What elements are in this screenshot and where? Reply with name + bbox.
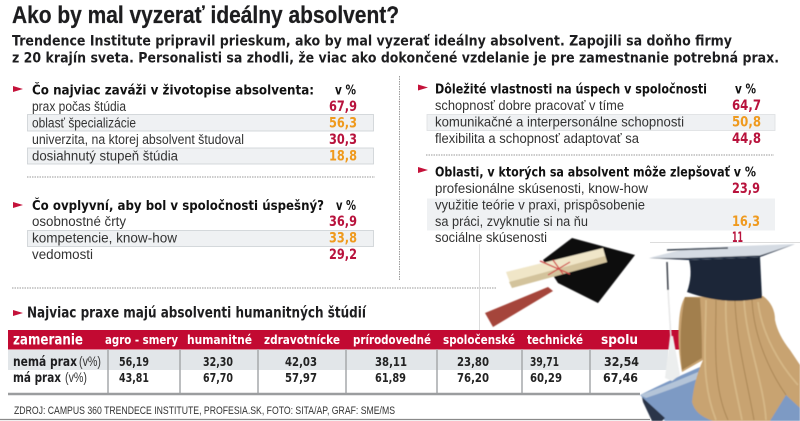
row labels <box>435 98 684 146</box>
row values: 11 <box>732 230 743 246</box>
marker arrow <box>13 202 23 208</box>
table header: technické <box>527 332 583 347</box>
row: ma prax: 60,29 <box>530 370 562 385</box>
panel: oblasti zlepsovania <box>418 164 775 246</box>
row: nema prax: 56,19 <box>119 354 149 369</box>
row labels <box>32 214 177 262</box>
table header: zdravotnícke <box>264 332 340 347</box>
icon: mortarboard with diploma scroll <box>485 238 635 327</box>
row: ma prax: 61,89 <box>375 370 406 385</box>
row labels: profesionálne skúsenosti, know-how <box>435 181 648 196</box>
gown <box>640 360 800 421</box>
row values <box>329 214 357 263</box>
row: ma prax: 76,20 <box>457 370 489 385</box>
row: nema prax <box>13 354 639 370</box>
unit label: v % <box>335 82 356 98</box>
row labels: kompetencie, know-how <box>32 230 177 246</box>
row: nema prax: 23,80 <box>457 354 489 369</box>
row band <box>427 114 775 130</box>
row labels: sociálne skúsenosti <box>435 230 547 245</box>
table header: prírodovedné <box>353 332 431 347</box>
row values: 50,8 <box>732 114 761 130</box>
row labels: dosiahnutý stupeň štúdia <box>32 148 178 164</box>
row: ma prax: má prax <box>13 371 61 386</box>
unit label: v % <box>336 198 356 214</box>
row labels: využitie teórie v praxi, prispôsobenie <box>435 198 645 212</box>
hair <box>678 296 800 421</box>
illustration: graduate seen from behind <box>640 244 800 421</box>
row: nema prax: 38,11 <box>375 354 407 369</box>
row values <box>732 98 761 147</box>
heading: Dôležité vlastnosti na úspech v spoločnosti <box>435 82 707 98</box>
table header: zameranie <box>13 330 83 348</box>
row labels: flexibilita a schopnosť adaptovať sa <box>435 131 639 146</box>
row values <box>329 99 357 164</box>
row values: 16,3 <box>732 214 760 230</box>
row: ma prax: 43,81 <box>119 370 149 385</box>
source line: ZDROJ: CAMPUS 360 TRENDECE INSTITUTE, PROFESIA.SK, FOTO: SITA/AP, GRAF: SME/MS <box>14 405 395 417</box>
row: ma prax <box>13 370 638 386</box>
row: nema prax: 32,30 <box>203 354 233 369</box>
marker arrow <box>418 84 428 90</box>
panel: co ovplyvni uspech <box>13 196 374 263</box>
row band <box>427 198 775 230</box>
row labels: schopnosť dobre pracovať v tíme <box>435 98 624 113</box>
table header: spoločenské <box>443 332 515 347</box>
row values: 36,9 <box>329 214 357 230</box>
intro text <box>12 34 779 66</box>
row: ma prax: 67,46 <box>603 370 638 385</box>
unit label: v % <box>735 82 756 98</box>
row: nema prax: nemá prax <box>13 355 78 370</box>
table header: humanitné <box>187 332 252 347</box>
row labels: osobnostné črty <box>32 214 126 229</box>
panel: dolezite vlastnosti <box>418 82 775 147</box>
row bands <box>28 114 374 164</box>
row labels: oblasť špecializácie <box>32 116 136 130</box>
marker arrow <box>418 167 428 173</box>
section heading: table: Najviac praxe majú absolventi humanitných štúdií <box>27 304 367 322</box>
row labels: sa práci, zvyknutie si na ňu <box>435 214 588 229</box>
row values: 64,7 <box>732 98 761 114</box>
heading: Čo najviac zaváži v životopise absolventa: <box>32 80 314 98</box>
row values: 44,8 <box>732 131 761 147</box>
row: nema prax: (v%) <box>79 354 101 369</box>
row values: 23,9 <box>732 181 760 197</box>
row values: 67,9 <box>329 99 357 115</box>
row labels: prax počas štúdia <box>32 99 126 114</box>
row: nema prax: 42,03 <box>285 354 317 369</box>
row values: 18,8 <box>329 148 357 164</box>
heading: Čo ovplyvní, aby bol v spoločnosti úspešný? <box>32 196 324 214</box>
row band <box>28 230 374 246</box>
row labels: komunikačné a interpersonálne schopnosti <box>435 114 684 130</box>
table header: agro - smery <box>105 332 178 347</box>
row values: 33,8 <box>329 230 357 246</box>
row: ma prax: 57,97 <box>285 370 317 385</box>
row: ma prax: (v%) <box>65 370 87 385</box>
row values: 29,2 <box>329 247 357 263</box>
row: ma prax: 67,70 <box>203 370 233 385</box>
marker arrow <box>13 86 23 92</box>
table <box>8 330 682 394</box>
row labels <box>435 181 648 245</box>
title: Ako by mal vyzerať ideálny absolvent? <box>12 2 399 29</box>
table header <box>8 330 682 350</box>
row labels: univerzita, na ktorej absolvent študoval <box>32 132 244 147</box>
row: nema prax: 32,54 <box>604 354 639 369</box>
row labels: vedomosti <box>32 247 93 262</box>
row: nema prax: 39,71 <box>530 354 559 369</box>
table header: spolu <box>601 332 638 348</box>
row values: 56,3 <box>329 116 357 132</box>
cap <box>687 257 762 301</box>
panel: co najviac zavazi v zivotopise <box>13 80 374 164</box>
row values <box>732 181 760 246</box>
row values: 30,3 <box>329 132 357 148</box>
tassel <box>665 262 680 381</box>
row labels <box>32 99 244 164</box>
